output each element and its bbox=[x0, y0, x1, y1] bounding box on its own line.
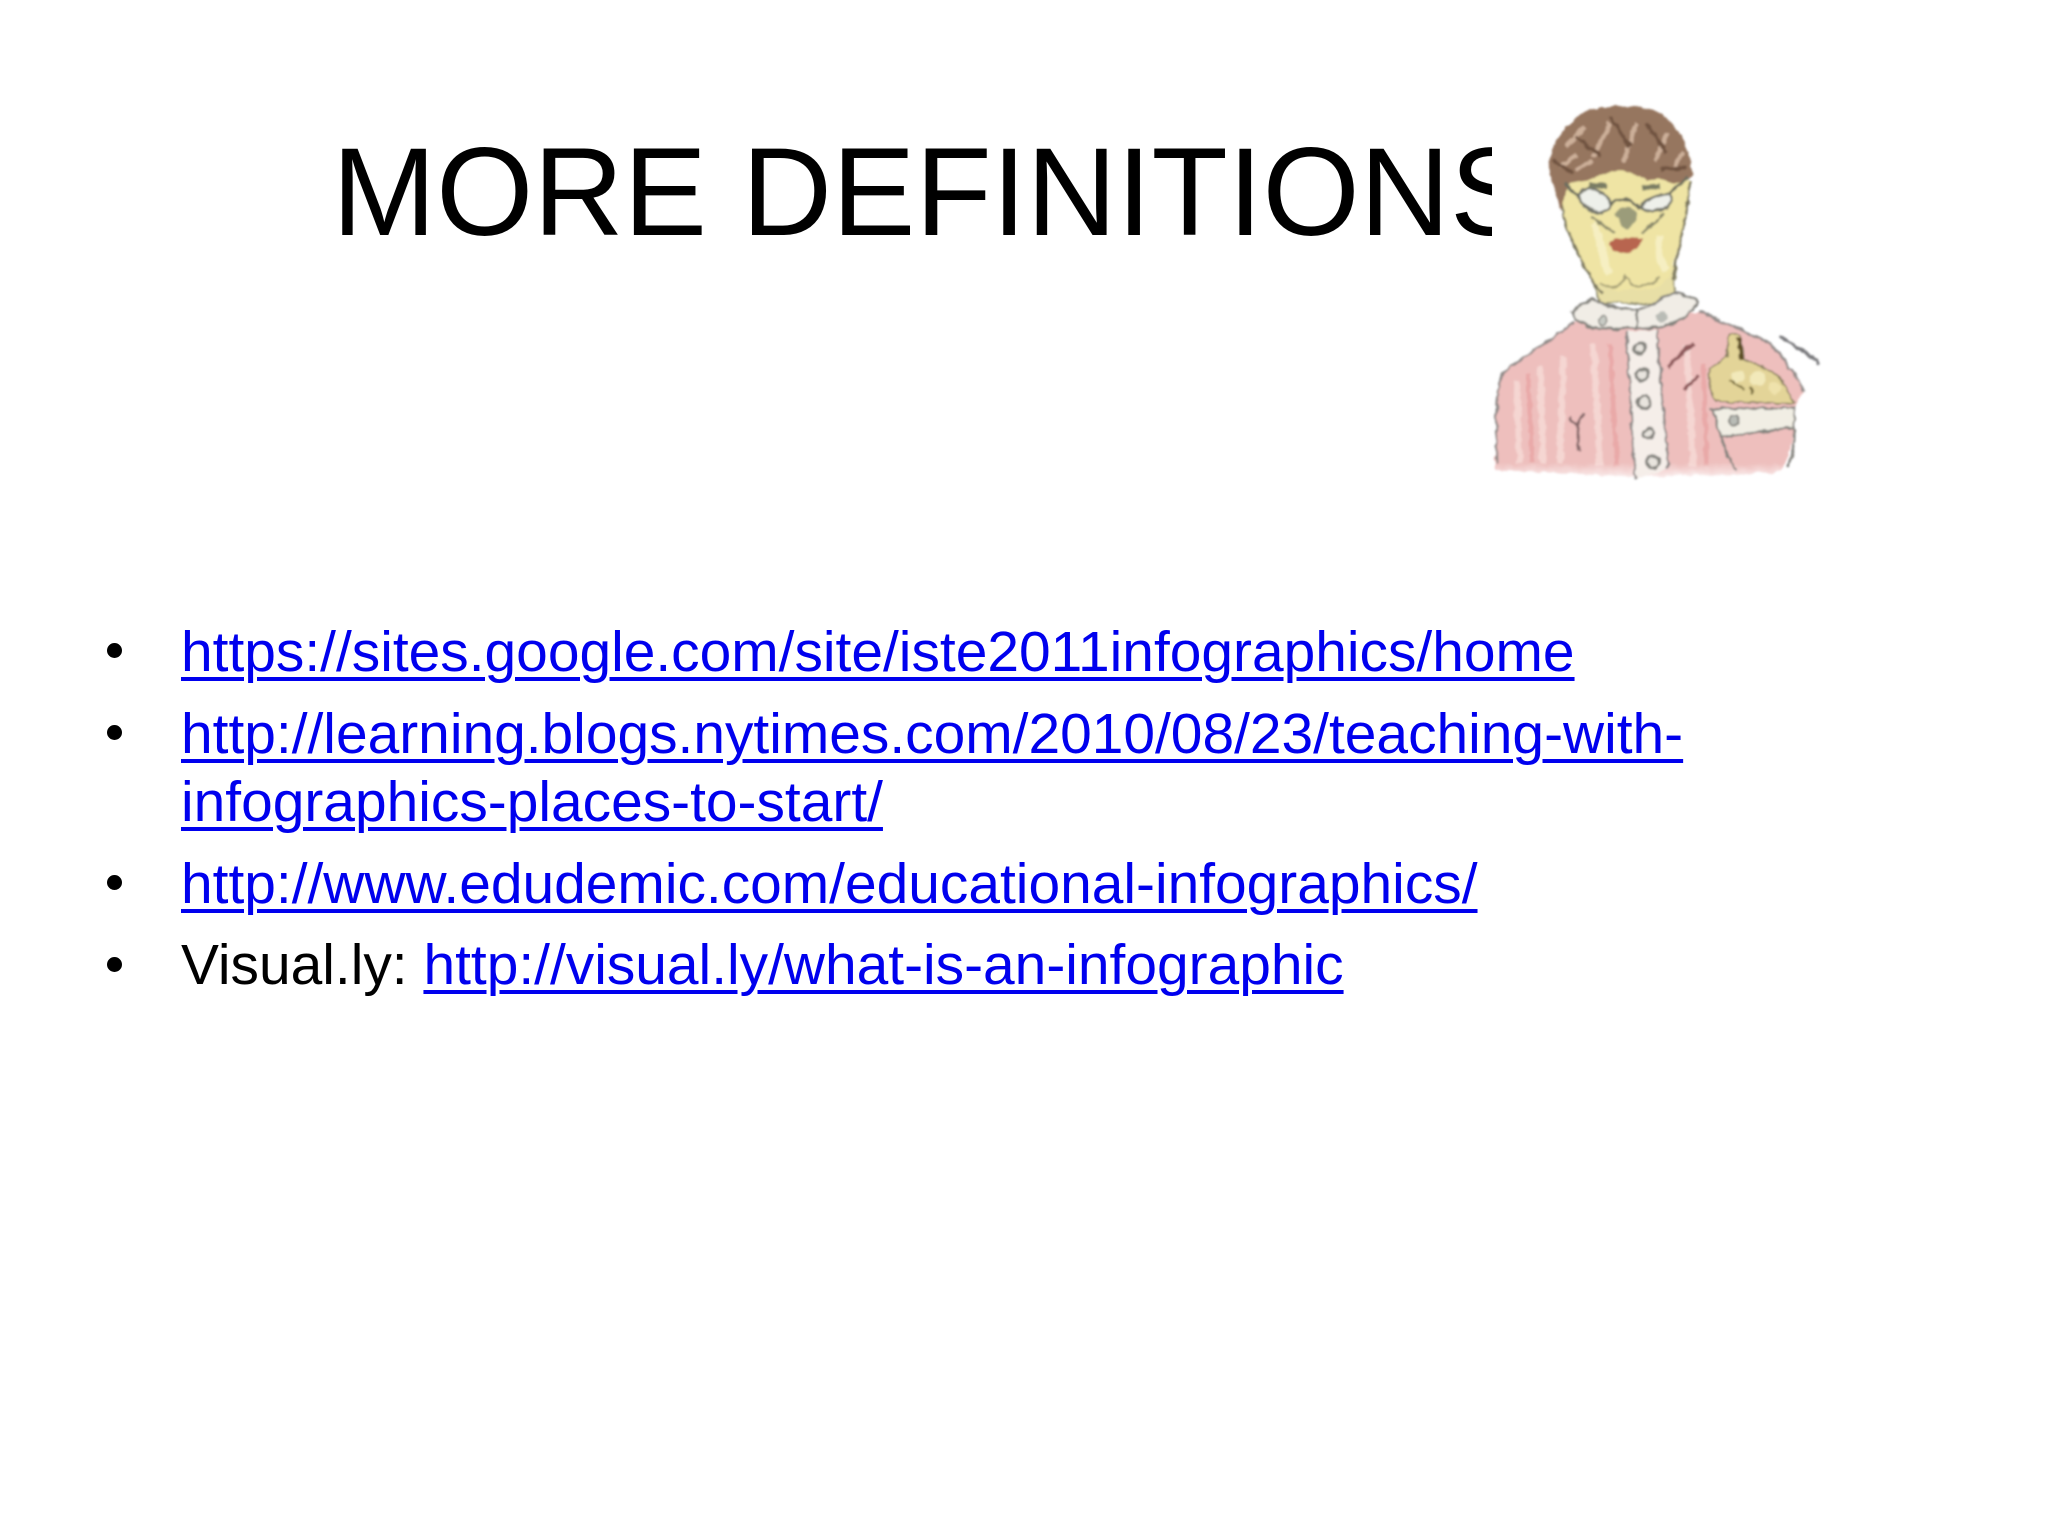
cuff bbox=[1712, 408, 1795, 470]
link: edudemic.com: http://www.edudemic.com/educational-infographics/ bbox=[181, 852, 1478, 916]
head bbox=[1557, 157, 1690, 293]
bullet 3 bbox=[107, 875, 122, 890]
hair bbox=[1548, 106, 1692, 212]
neck bbox=[1592, 267, 1677, 303]
mouth bbox=[1608, 238, 1643, 253]
bullet list of links bbox=[107, 620, 1684, 997]
link: learning.blogs.nytimes.com line 1: http://learning.blogs.nytimes.com/2010/08/23/teaching-with- bbox=[181, 702, 1683, 766]
icon: hand-drawn professor with glasses pointing bbox=[1492, 104, 1821, 481]
glasses and nose bbox=[1565, 177, 1688, 233]
bullet 2 bbox=[107, 725, 122, 740]
motion line bbox=[1780, 336, 1818, 365]
body: pink shirt bbox=[1493, 312, 1803, 480]
link: sites.google.com: https://sites.google.com/site/iste2011infographics/home bbox=[181, 620, 1575, 684]
bullet 4 bbox=[107, 957, 122, 972]
placket with buttons bbox=[1627, 330, 1668, 480]
link: learning.blogs.nytimes.com line 2: infographics-places-to-start/ bbox=[181, 770, 883, 834]
hand pointing bbox=[1708, 333, 1795, 403]
Visual.ly link line: Visual.ly: http://visual.ly/what-is-an-infographic bbox=[181, 933, 1344, 997]
bullet 1 bbox=[107, 643, 122, 658]
collar bbox=[1572, 293, 1698, 328]
